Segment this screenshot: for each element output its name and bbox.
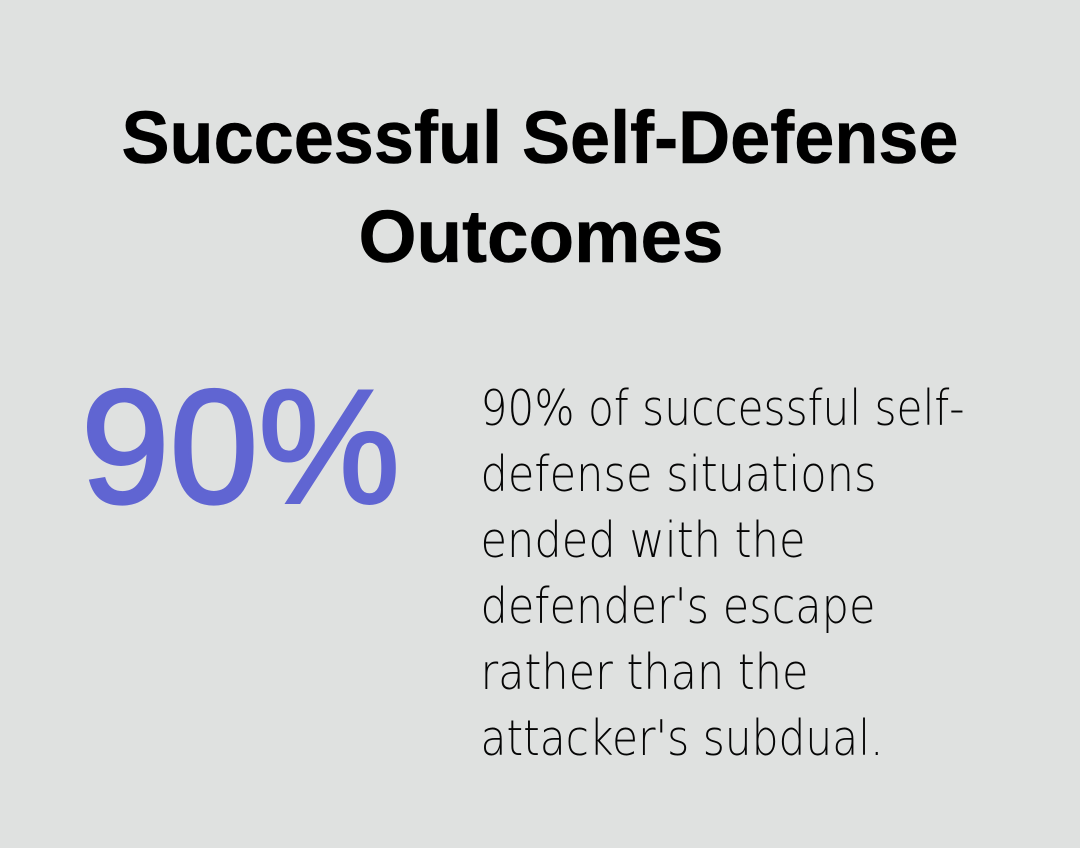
title	[122, 96, 958, 278]
description text block: ended with the	[480, 512, 806, 569]
big statistic: 90%: 90%	[81, 356, 400, 538]
description text block: defense situations	[480, 446, 876, 503]
description text block: defender's escape	[480, 578, 876, 635]
description text block: 90% of successful self-	[480, 380, 964, 437]
title: Successful Self-Defense	[122, 96, 958, 179]
description text block	[480, 380, 964, 767]
title: Outcomes	[358, 195, 724, 278]
description text block: attacker's subdual.	[480, 710, 884, 767]
description text block: rather than the	[480, 644, 808, 701]
